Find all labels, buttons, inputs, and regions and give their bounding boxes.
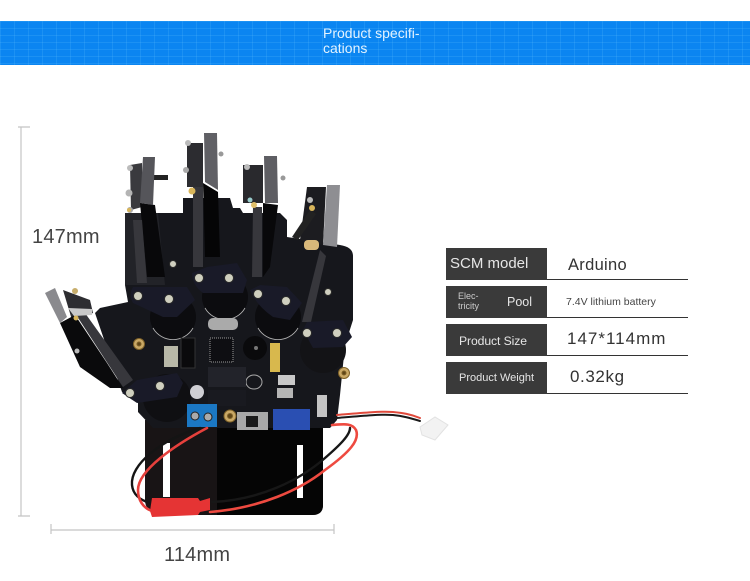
height dimension line xyxy=(18,127,30,516)
palm board xyxy=(95,198,353,428)
circuit board parts xyxy=(164,318,327,417)
little finger xyxy=(292,185,340,322)
rule xyxy=(547,393,688,394)
rule xyxy=(547,279,688,280)
brass standoffs xyxy=(134,338,350,422)
mounting plate xyxy=(145,420,323,515)
label: Pool: Pool xyxy=(507,295,532,309)
width dimension line xyxy=(51,524,334,534)
ring finger xyxy=(243,156,286,277)
rule xyxy=(547,317,688,318)
servo motors xyxy=(143,274,346,422)
header title: cations xyxy=(323,40,367,56)
value: battery: 7.4V lithium battery xyxy=(566,296,656,308)
spec row: Electricity pool xyxy=(446,286,547,318)
spec row: Product Size xyxy=(446,324,547,356)
value: weight: 0.32kg xyxy=(570,367,625,386)
label: Product Weight xyxy=(459,372,534,384)
servo horns xyxy=(122,263,352,403)
label: SCM model xyxy=(450,255,528,272)
plate slots xyxy=(163,443,303,498)
middle finger xyxy=(183,133,224,267)
label: Electricity xyxy=(458,291,479,311)
screws xyxy=(126,260,342,398)
label: Electricity: tricity xyxy=(458,300,479,310)
spec row: SCM model xyxy=(446,248,547,280)
label: Product Size xyxy=(459,334,527,348)
blue pin header xyxy=(273,409,310,430)
rule xyxy=(547,355,688,356)
value: Arduino: Arduino xyxy=(568,256,627,274)
blue terminal block xyxy=(187,404,217,427)
red connector xyxy=(150,498,210,517)
wires xyxy=(132,412,420,512)
index finger xyxy=(126,157,168,283)
header title xyxy=(323,25,419,56)
white connector xyxy=(420,417,448,440)
label: Electricity: Elec- xyxy=(458,291,479,301)
header band xyxy=(0,21,750,65)
text: 147mm: 147mm xyxy=(32,226,100,248)
text: 114mm: 114mm xyxy=(164,544,230,566)
slide switch xyxy=(237,412,268,430)
value: size: 147*114mm xyxy=(567,329,666,348)
spec row: Product Weight xyxy=(446,362,547,394)
header title: Product specifi- xyxy=(323,25,419,41)
thumb xyxy=(45,288,133,388)
board shading xyxy=(125,213,165,285)
